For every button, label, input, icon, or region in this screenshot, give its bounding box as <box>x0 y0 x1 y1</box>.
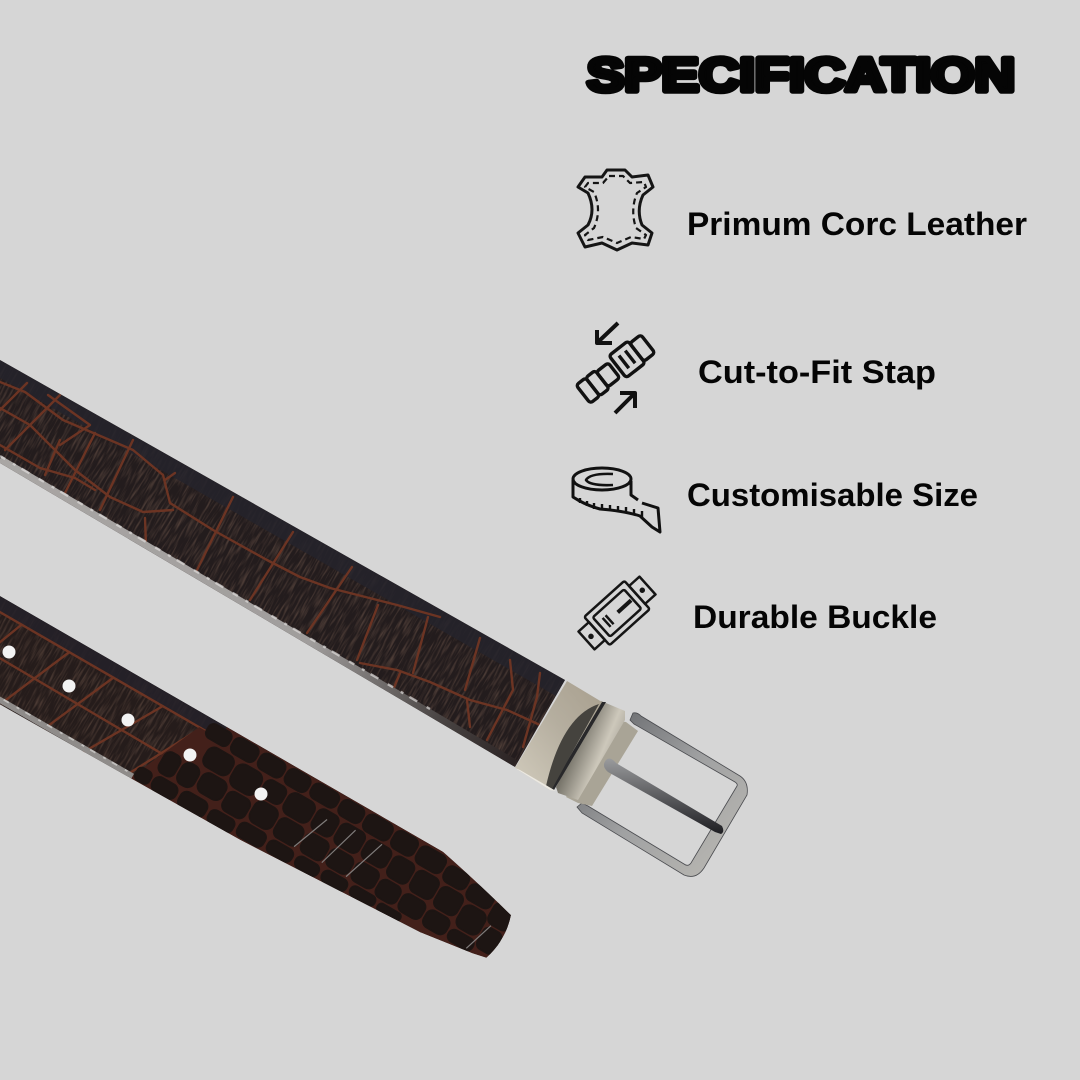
belt holes <box>2 646 268 800</box>
buckle <box>515 681 747 876</box>
label: Cut-to-Fit Stap <box>698 354 936 390</box>
silver lower edge <box>0 696 134 778</box>
icon: cut-to-fit strap <box>574 323 656 413</box>
spec item: buckle <box>574 571 937 655</box>
infographic canvas <box>0 55 1026 958</box>
icon: measuring tape <box>573 468 660 532</box>
silver lower edge <box>0 459 515 763</box>
buckle frame <box>577 713 747 876</box>
lower belt strap with holes <box>0 596 511 958</box>
upper belt strap <box>0 360 565 767</box>
left-section seams <box>0 610 206 773</box>
buckle pin <box>604 759 723 834</box>
icon: durable buckle <box>574 571 660 655</box>
icon: leather hide <box>578 170 653 250</box>
label: Durable Buckle <box>693 599 937 635</box>
label: Primum Corc Leather <box>687 206 1027 242</box>
title: SPECIFICATION <box>587 48 1015 101</box>
buckle centre bar <box>566 720 638 806</box>
folded clasp <box>556 701 625 800</box>
spec item: strap <box>574 323 936 413</box>
spec item: leather <box>578 170 1027 250</box>
crocodile scales <box>134 723 511 955</box>
clasp plate <box>515 681 602 790</box>
leather seam lines <box>0 382 540 747</box>
spec item: size <box>573 468 978 532</box>
scale section seam base <box>130 727 511 958</box>
label: Customisable Size <box>687 477 978 513</box>
